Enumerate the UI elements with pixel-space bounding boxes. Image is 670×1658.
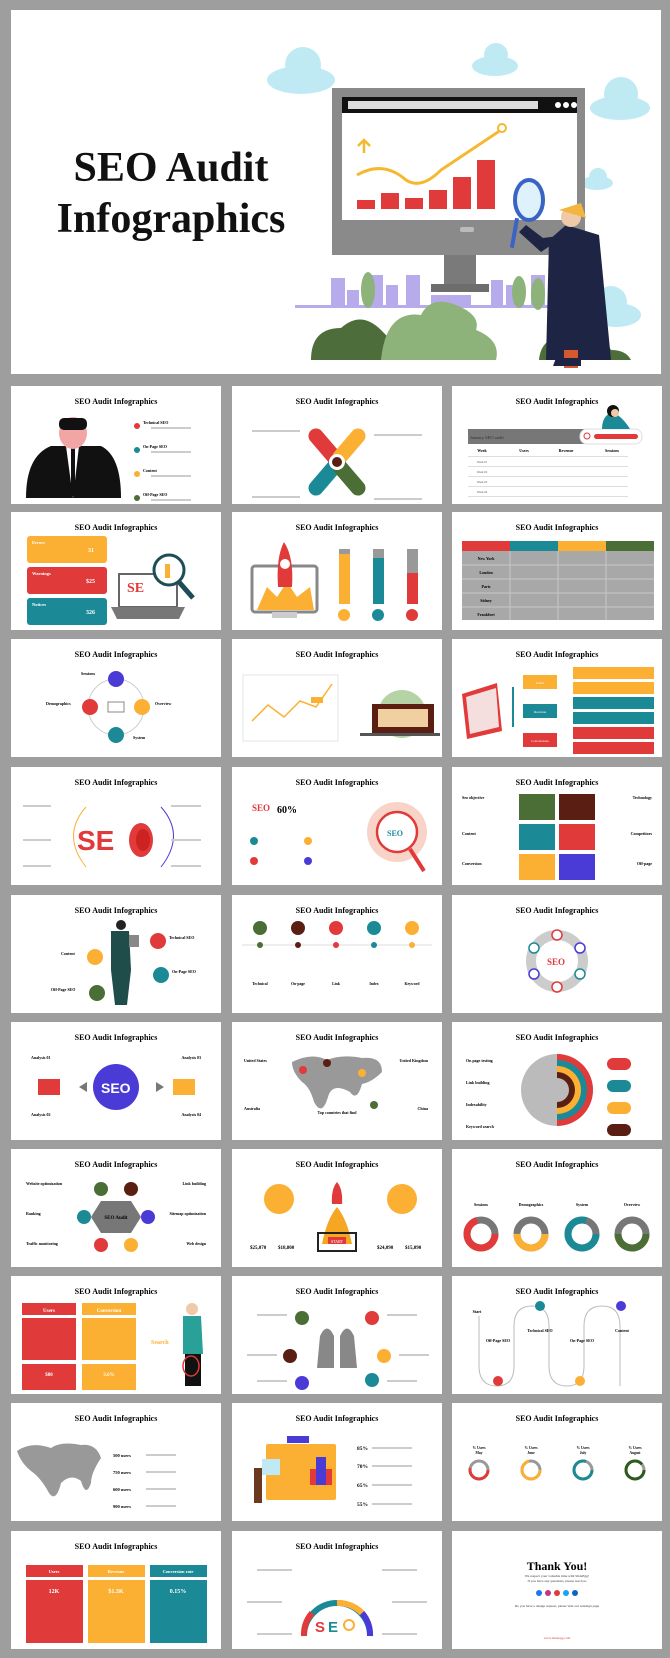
thumbnail: thank you: If you have any questions, please reach us	[528, 1579, 587, 1584]
thumbnail: percentages with people: 65%	[357, 1483, 368, 1489]
thumbnail: monthly rings: % Users	[576, 1446, 590, 1450]
bushes	[311, 272, 631, 360]
thumbnail: city table	[452, 512, 662, 630]
thumbnail: SEO target	[11, 767, 221, 885]
thumbnail: users conversion search man: 3.6%	[103, 1373, 115, 1378]
thumbnail: users revenue conversion rate columns: Users	[49, 1569, 60, 1574]
thumbnail: audit table: Revenue	[559, 448, 574, 453]
thumbnail: audit table: SEO Audit Infographics	[516, 397, 598, 406]
thumbnail: hexagons: Sitemap optimization	[169, 1211, 207, 1216]
thumbnail: sessions cycle: SEO Audit Infographics	[75, 650, 157, 659]
thumbnail: monthly rings: % Users	[524, 1446, 538, 1450]
thumbnail: users revenue conversions: Revenue	[534, 710, 547, 714]
thumbnail: audit table: Sessions	[605, 448, 619, 453]
thumbnail: monthly rings: May	[476, 1451, 483, 1455]
thumbnail: roadmap	[452, 1276, 662, 1394]
thumbnail: users revenue conversion rate columns	[11, 1531, 221, 1649]
thumbnail: man with laptop: On-Page SEO	[172, 969, 196, 974]
thumbnail: six numbered tiles: Conversion	[462, 861, 482, 866]
thumbnail: SEO target: SE	[77, 825, 114, 856]
thumbnail: 60% magnifier: 60%	[277, 805, 297, 816]
thumbnail: line chart: SEO Audit Infographics	[296, 650, 378, 659]
thumbnail: rocket start: $18,800	[278, 1246, 295, 1251]
thumbnail: SEO arc: SEO Audit Infographics	[296, 1542, 378, 1551]
thumbnail: binoculars man: Technical SEO	[143, 420, 168, 425]
thumbnail: 60% magnifier: SEO	[387, 829, 403, 838]
thumbnail: errors warnings notices: $25	[86, 578, 95, 585]
thumbnail: audit table: Users	[519, 448, 529, 453]
thumbnail: errors warnings notices: 326	[86, 610, 95, 616]
thumbnail: errors warnings notices: Errors	[32, 540, 45, 545]
thumbnail: SEO analysis: Analysis 02	[31, 1112, 50, 1117]
thumbnail: six numbered tiles: Off-page	[637, 861, 652, 866]
thumbnail: users revenue conversion rate columns: Conversion rate	[163, 1569, 193, 1574]
thumbnail: errors warnings notices: 31	[88, 548, 94, 554]
title	[57, 145, 285, 242]
thumbnail: errors warnings notices: SEO Audit Infographics	[75, 523, 157, 532]
thumbnail: audit table: Week 02	[477, 470, 488, 474]
thumbnail: SEO analysis	[11, 1022, 221, 1140]
thumbnail: binoculars man: On-Page SEO	[143, 444, 167, 449]
thumbnail: percentages with people: SEO Audit Infographics	[296, 1414, 378, 1423]
thumbnail: percentages with people	[232, 1403, 442, 1521]
thumbnail: 60% magnifier: SEO	[252, 803, 270, 813]
thumbnail: timeline five steps: Technical	[252, 982, 268, 986]
thumbnail: six numbered tiles: Content	[462, 831, 476, 836]
thumbnail: roadmap: On-Page SEO	[570, 1338, 594, 1343]
thumbnail: users conversion search man: Users	[43, 1309, 55, 1314]
thumbnail: binoculars man: Off-Page SEO	[143, 492, 167, 497]
thumbnail: world map: SEO Audit Infographics	[296, 1033, 378, 1042]
thumbnail: donuts: Sessions	[474, 1202, 488, 1207]
thumbnail: sessions cycle	[11, 639, 221, 757]
thumbnail: team at desk: SEO Audit Infographics	[296, 1287, 378, 1296]
thumbnail: concentric semicircles: On page testing	[466, 1058, 493, 1063]
thumbnail: hexagons	[11, 1149, 221, 1267]
thumbnail: users conversion search man: SEO Audit Infographics	[75, 1287, 157, 1296]
thumbnail: man with laptop: Off-Page SEO	[51, 987, 75, 992]
thumbnail: 60% magnifier	[232, 767, 442, 885]
thumbnail: monthly rings: August	[630, 1451, 641, 1455]
thumbnail: rocket start: SEO Audit Infographics	[296, 1160, 378, 1169]
thumbnail: concentric semicircles: SEO Audit Infographics	[516, 1033, 598, 1042]
thumbnail: rocket start: START	[331, 1239, 344, 1244]
thumbnail: hexagons: Link building	[183, 1181, 206, 1186]
thumbnail: audit table: Week	[477, 448, 488, 453]
thumbnail: percentages with people: 85%	[357, 1446, 368, 1452]
thumbnail: rocket bars	[232, 512, 442, 630]
thumbnail: sessions cycle: Sessions	[81, 671, 95, 676]
thumbnail: SEO ring	[452, 895, 662, 1013]
thumbnail: audit table: Week 04	[477, 490, 488, 494]
thumbnail: binoculars man	[11, 386, 221, 504]
thumbnail: errors warnings notices: Warnings	[32, 571, 51, 576]
thumbnail: SEO ring: SEO	[547, 957, 565, 967]
thumbnail: donuts: Overview	[624, 1202, 640, 1207]
thumbnail: map users: 500 users	[113, 1453, 131, 1458]
thumbnail: six numbered tiles: SEO Audit Infographics	[516, 778, 598, 787]
thumbnail: monthly rings: June	[527, 1451, 535, 1455]
thumbnail: map users: 750 users	[113, 1470, 131, 1475]
thumbnail: users revenue conversions: Users	[536, 681, 545, 685]
thumbnail: thank you: www.slideegg.com	[544, 1636, 571, 1640]
thumbnail: map users: 900 users	[113, 1504, 131, 1509]
thumbnail: world map: United Kingdom	[399, 1058, 429, 1063]
thumbnail: world map: Top countries that find	[317, 1110, 357, 1115]
thumbnail: users revenue conversions	[452, 639, 662, 757]
thumbnail: users conversion search man: $80	[45, 1373, 53, 1378]
thumbnail: timeline five steps: Link	[332, 982, 341, 986]
thumbnail: SEO analysis: Analysis 03	[182, 1055, 201, 1060]
thumbnail: man with laptop: Content	[61, 951, 75, 956]
thumbnail: six numbered tiles: Technology	[633, 795, 652, 800]
thumbnail: errors warnings notices: SE	[127, 581, 144, 596]
thumbnail: rocket start: $25,070	[250, 1246, 267, 1251]
hero panel	[11, 10, 661, 374]
thumbnail: rocket bars: SEO Audit Infographics	[296, 523, 378, 532]
thumbnail: map users: SEO Audit Infographics	[75, 1414, 157, 1423]
thumbnail: users revenue conversion rate columns: SEO Audit Infographics	[75, 1542, 157, 1551]
thumbnail: monthly rings: SEO Audit Infographics	[516, 1414, 598, 1423]
thumbnail: man with laptop: Technical SEO	[169, 935, 194, 940]
thumbnail: donuts: Demographics	[519, 1202, 544, 1207]
thumbnail: city table: Frankfurt	[477, 612, 495, 617]
thumbnail: city table: London	[479, 570, 493, 575]
thumbnail: monthly rings: % Users	[472, 1446, 486, 1450]
thumbnail: rocket start	[232, 1149, 442, 1267]
thumbnail: hexagons: SEO Audit	[104, 1216, 128, 1221]
thumbnail: concentric semicircles	[452, 1022, 662, 1140]
thumbnail: concentric semicircles: Indexability	[466, 1102, 487, 1107]
thumbnail: SEO arc	[232, 1531, 442, 1649]
thumbnail: cross diagram	[232, 386, 442, 504]
thumbnail: thank you: Thank You!	[527, 1559, 587, 1573]
thumbnail: donuts: SEO Audit Infographics	[516, 1160, 598, 1169]
thumbnail: thank you: We respect your valuable time with SlideEgg!	[525, 1574, 589, 1578]
thumbnail: map users	[11, 1403, 221, 1521]
thumbnail: users revenue conversion rate columns: 0.15%	[170, 1589, 186, 1595]
thumbnail: users revenue conversion rate columns: 12K	[49, 1589, 60, 1595]
thumbnail: SEO analysis: SEO	[101, 1080, 131, 1096]
thumbnail: roadmap: Off-Page SEO	[486, 1338, 510, 1343]
thumbnail: city table: Paris	[482, 584, 491, 589]
thumbnail: hexagons: Traffic monitoring	[26, 1241, 58, 1246]
thumbnail: binoculars man: Content	[143, 468, 157, 473]
thumbnail: audit table: January SEO audit	[470, 435, 504, 440]
thumbnail: timeline five steps	[232, 895, 442, 1013]
thumbnail: users revenue conversion rate columns: Revenue	[108, 1569, 124, 1574]
thumbnail: monthly rings: % Users	[628, 1446, 642, 1450]
thumbnail: six numbered tiles	[452, 767, 662, 885]
thumbnail: city table: New York	[478, 556, 495, 561]
thumbnail: six numbered tiles: Competitors	[631, 831, 652, 836]
thumbnail: cross diagram: SEO Audit Infographics	[296, 397, 378, 406]
thumbnail: hexagons: Web design	[186, 1241, 207, 1246]
thumbnail: sessions cycle: Demographics	[46, 701, 71, 706]
thumbnail: city table: SEO Audit Infographics	[516, 523, 598, 532]
thumbnail: errors warnings notices: Notices	[32, 602, 46, 607]
thumbnail: audit table: Week 01	[477, 460, 488, 464]
thumbnail: timeline five steps: Keyword	[405, 982, 420, 986]
thumbnail: audit table	[452, 386, 662, 504]
thumbnail: audit table: Week 03	[477, 480, 488, 484]
thumbnail: concentric semicircles: Link building	[466, 1080, 489, 1085]
title: SEO Audit	[74, 145, 268, 191]
thumbnail: SEO arc: E	[328, 1619, 338, 1636]
thumbnail: timeline five steps: Index	[369, 982, 379, 986]
thumbnail: 60% magnifier: SEO Audit Infographics	[296, 778, 378, 787]
thumbnail: SEO arc: S	[315, 1619, 325, 1636]
person with magnifier	[510, 180, 611, 368]
thumbnail: donuts: System	[576, 1202, 589, 1207]
thumbnail: map users: 600 users	[113, 1487, 131, 1492]
thumbnail: percentages with people: 70%	[357, 1464, 368, 1470]
thumbnail: hexagons: SEO Audit Infographics	[75, 1160, 157, 1169]
thumbnail: roadmap: Content	[615, 1328, 630, 1333]
thumbnail: users conversion search man: Search	[151, 1340, 169, 1346]
thumbnail: hexagons: Ranking	[26, 1211, 41, 1216]
thumbnail: percentages with people: 55%	[357, 1502, 368, 1508]
thumbnail: errors warnings notices	[11, 512, 221, 630]
thumbnail: rocket start: $15,090	[405, 1246, 422, 1251]
thumbnail: rocket start: $24,090	[377, 1246, 394, 1251]
thumbnail: donuts	[452, 1149, 662, 1267]
monitor	[332, 88, 585, 292]
thumbnail: world map: Australia	[244, 1106, 260, 1111]
thumbnail: SEO target: SEO Audit Infographics	[75, 778, 157, 787]
thumbnail: world map: United States	[244, 1058, 267, 1063]
icon: clouds	[267, 43, 650, 327]
thumbnail: concentric semicircles: Keyword search	[466, 1124, 495, 1129]
thumbnail: timeline five steps: On-page	[291, 982, 305, 986]
thumbnail: world map	[232, 1022, 442, 1140]
thumbnail: users conversion search man: Conversion	[97, 1309, 121, 1314]
thumbnail: sessions cycle: System	[133, 735, 146, 740]
thumbnail: world map: China	[418, 1106, 428, 1111]
thumbnail: users revenue conversions: SEO Audit Infographics	[516, 650, 598, 659]
thumbnail: SEO analysis: Analysis 04	[182, 1112, 201, 1117]
thumbnail: SEO analysis: SEO Audit Infographics	[75, 1033, 157, 1042]
thumbnail: city table: Sidney	[480, 598, 492, 603]
thumbnail: monthly rings: July	[580, 1451, 586, 1455]
thumbnail: line chart	[232, 639, 442, 757]
thumbnail: roadmap: Technical SEO	[527, 1328, 553, 1333]
thumbnail: six numbered tiles: Seo objective	[462, 795, 485, 800]
thumbnail: users revenue conversion rate columns: $1.3K	[108, 1588, 124, 1595]
thumbnail: thank you: Do you have a design request, please visit our redesign page	[515, 1604, 600, 1609]
thumbnail: monthly rings	[452, 1403, 662, 1521]
thumbnail: roadmap: SEO Audit Infographics	[516, 1287, 598, 1296]
thumbnail: SEO analysis: Analysis 01	[31, 1055, 50, 1060]
thumbnail: hexagons: Website optimization	[26, 1181, 63, 1186]
city skyline	[295, 275, 555, 308]
thumbnail: team at desk	[232, 1276, 442, 1394]
thumbnail: timeline five steps: SEO Audit Infographics	[296, 906, 378, 915]
thumbnail: users revenue conversions: Conversions	[531, 739, 549, 743]
thumbnail: roadmap: Start	[473, 1309, 482, 1314]
thumbnail: SEO ring: SEO Audit Infographics	[516, 906, 598, 915]
thumbnail: man with laptop	[11, 895, 221, 1013]
thumbnail: sessions cycle: Overview	[155, 701, 172, 706]
thumbnail: users conversion search man	[11, 1276, 221, 1394]
thumbnail: man with laptop: SEO Audit Infographics	[75, 906, 157, 915]
title: Infographics	[57, 196, 285, 242]
thumbnail: thank you	[452, 1531, 662, 1649]
thumbnail: binoculars man: SEO Audit Infographics	[75, 397, 157, 406]
